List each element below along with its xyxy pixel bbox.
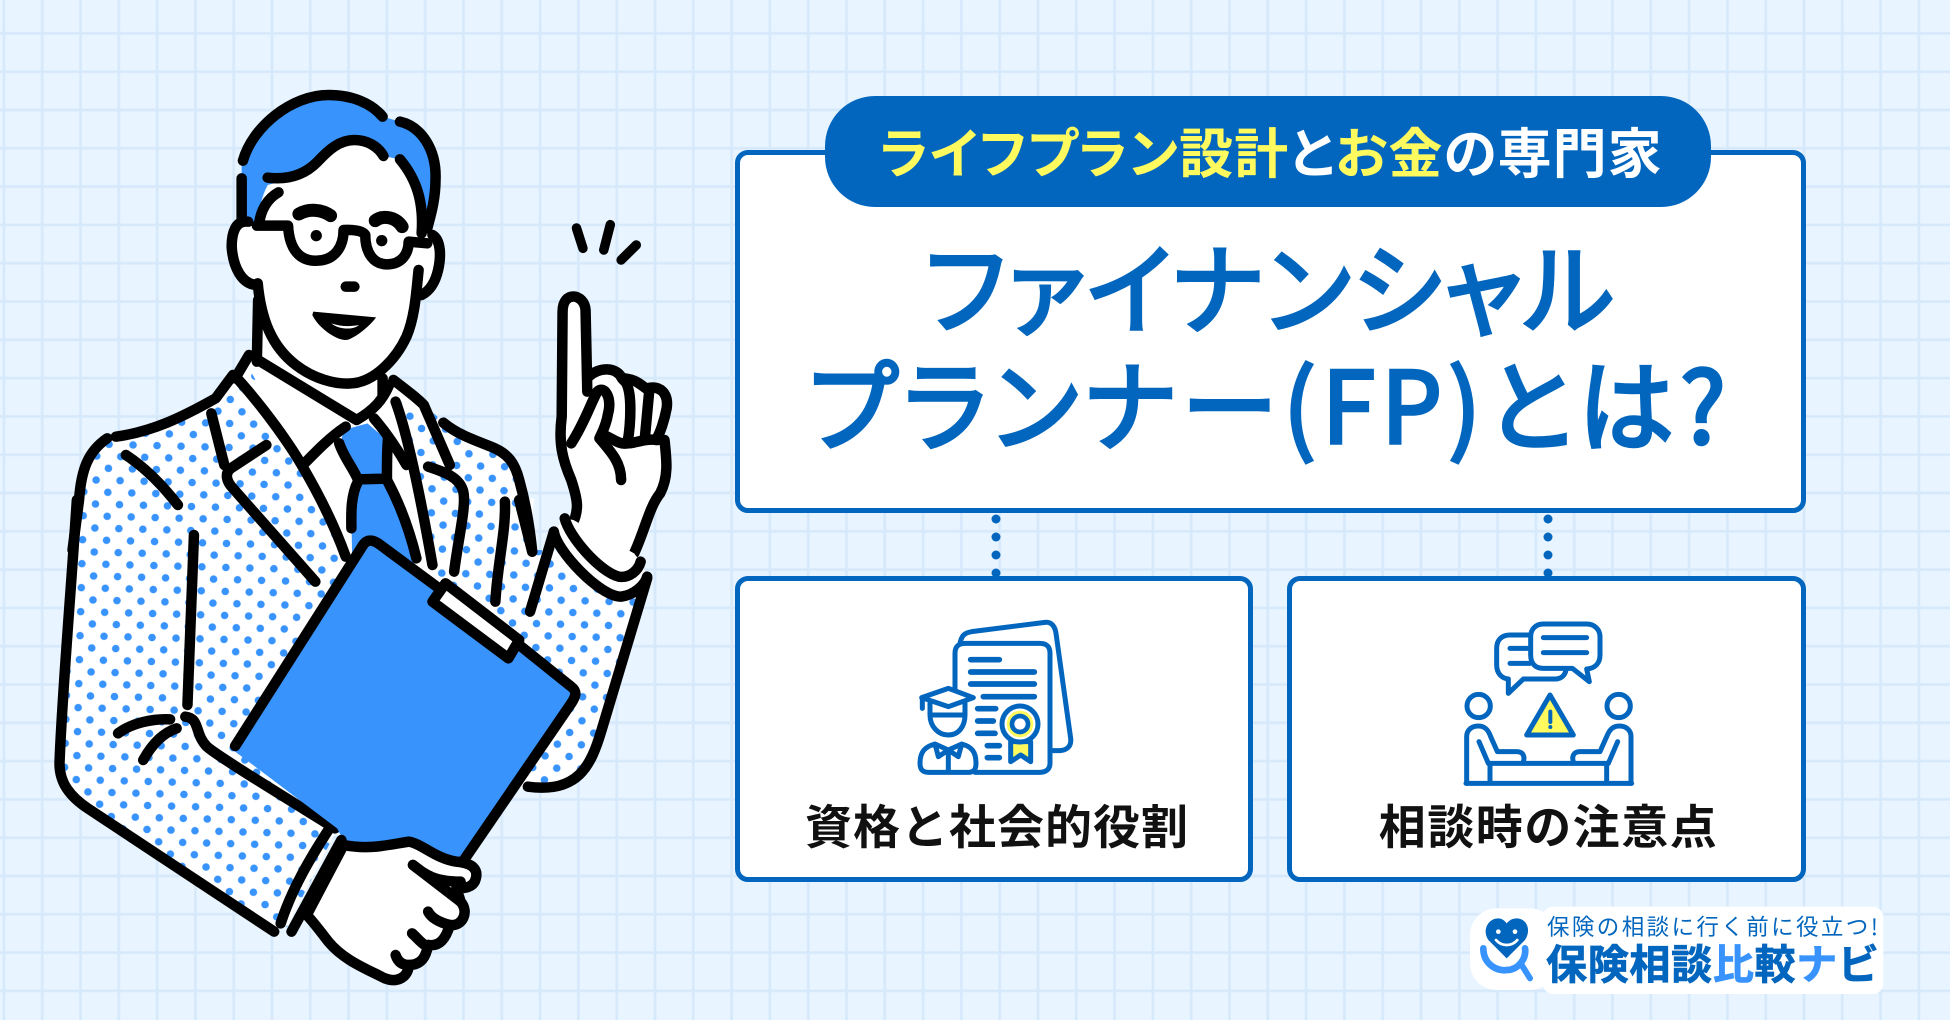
face outline and ears	[232, 222, 440, 395]
label: qualifications and social role: 資格と社会的役割	[805, 789, 1189, 858]
hair outlines	[242, 95, 436, 233]
necktie	[339, 423, 417, 563]
heading badge pill	[825, 96, 1711, 207]
jacket lower outlines	[60, 500, 647, 932]
logo tagline: 保険の相談に行く前に役立つ!	[1547, 910, 1880, 942]
title line 1: ファイナンシャル	[925, 212, 1616, 355]
shirt	[248, 367, 432, 570]
glasses	[257, 226, 427, 264]
illustration: businessman holding a clipboard and raising a finger	[54, 90, 672, 986]
jacket: dotted fabric	[64, 362, 636, 929]
sparkle lines	[576, 225, 636, 260]
eyes	[311, 230, 387, 246]
icon: certificate and graduate	[918, 620, 1074, 775]
sleeve cuff, right	[554, 518, 647, 597]
panel: consultation cautions	[1287, 576, 1806, 882]
hair	[242, 95, 436, 230]
badge text: ライフプラン設計とお金の専門家	[879, 110, 1663, 189]
label: consultation cautions: 相談時の注意点	[1379, 789, 1718, 858]
lower body, clipboard and hand	[60, 500, 647, 980]
jacket and collar lines	[73, 355, 532, 705]
logo sticker and icon	[1470, 906, 1884, 994]
clipboard	[231, 541, 576, 863]
title line 2: プランナー(FP)とは?	[809, 329, 1732, 472]
eyebrows	[299, 210, 402, 227]
hand holding clipboard	[281, 830, 476, 980]
panel: qualifications and social role	[735, 576, 1253, 882]
mouth	[312, 312, 376, 340]
nose	[346, 281, 354, 292]
logo: hoken soudan hikaku navi	[1470, 906, 1884, 994]
upper body, head and raised hand	[73, 95, 667, 705]
raised hand	[561, 296, 667, 570]
panel: main title box	[735, 150, 1806, 513]
icon: two people talking with warning sign	[1464, 622, 1634, 786]
logo name: 保険相談比較ナビ	[1546, 931, 1880, 991]
neck and face	[231, 140, 441, 420]
